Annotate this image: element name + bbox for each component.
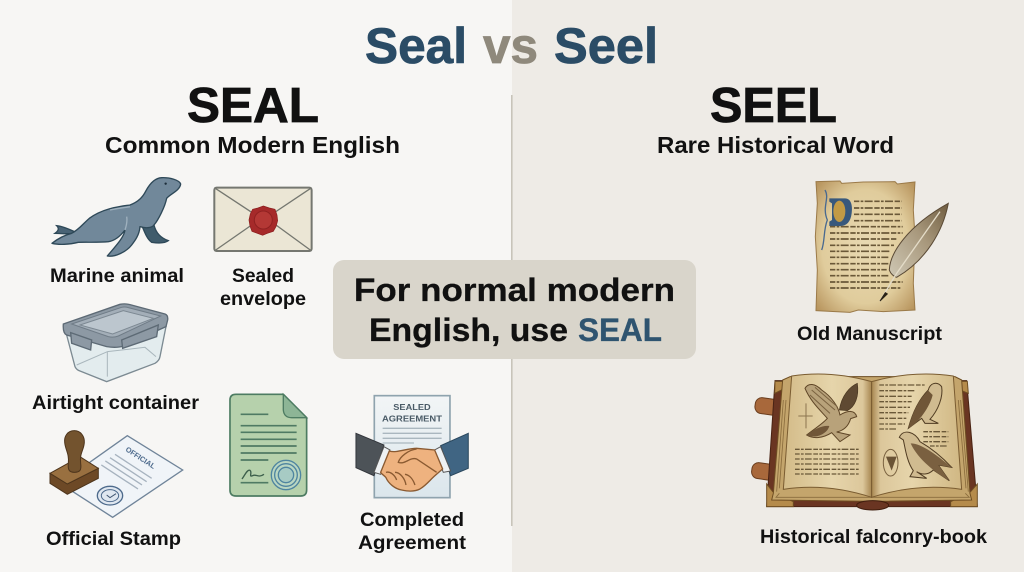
subheading: Common Modern English: Common Modern English: [105, 132, 400, 158]
icon: sealed envelope: [214, 188, 312, 251]
label: Historical falconry-book: Historical falconry-book: [760, 527, 987, 548]
label: Sealed envelope: envelope: [220, 289, 306, 310]
icon: official stamp and document: OFFICIAL: [124, 445, 158, 471]
label: Official Stamp: Official Stamp: [46, 529, 181, 550]
label: Completed Agreement: [358, 510, 467, 554]
icon: historical falconry book: [751, 374, 977, 510]
label: Marine animal: Marine animal: [50, 266, 184, 287]
label: Completed Agreement: Completed: [360, 510, 464, 531]
label: Airtight container: Airtight container: [32, 393, 200, 414]
panel: right background: [512, 0, 1024, 572]
icon: handshake over sealed agreement: SEALED: [393, 402, 431, 412]
illustration: perched falcon: [908, 383, 942, 428]
title: Seal: [365, 18, 467, 74]
callout: usage advice: English, use: [369, 312, 568, 348]
callout: usage advice: [333, 260, 696, 359]
heading: SEAL: SEAL: [187, 79, 319, 133]
label: Sealed envelope: Sealed: [232, 266, 294, 287]
icon: seal animal: [52, 178, 181, 256]
callout: usage advice: SEAL: [578, 312, 662, 348]
title: [365, 18, 658, 74]
icon: handshake over sealed agreement: AGREEMENT: [382, 414, 443, 424]
icon: green certificate: [230, 394, 307, 496]
subheading: Rare Historical Word: Rare Historical Word: [657, 132, 894, 158]
title: Seel: [554, 18, 658, 74]
icon: official stamp and document: [50, 431, 183, 517]
panel: SEAL column: [32, 79, 468, 554]
label: Sealed envelope: [220, 266, 306, 310]
label: Completed Agreement: Agreement: [358, 533, 467, 554]
illustration: large falcon: [899, 432, 952, 481]
illustration: eagle: [805, 383, 858, 442]
icon: handshake over sealed agreement: [356, 396, 468, 498]
panel: left background: [0, 0, 512, 572]
icon: airtight container: [63, 304, 168, 382]
label: Old Manuscript: Old Manuscript: [797, 324, 943, 345]
heading: SEEL: SEEL: [710, 79, 837, 133]
title: vs: [483, 18, 538, 74]
callout: usage advice: For normal modern: [354, 272, 675, 308]
panel: SEEL column: [657, 79, 987, 548]
icon: old manuscript with quill: [815, 181, 948, 312]
